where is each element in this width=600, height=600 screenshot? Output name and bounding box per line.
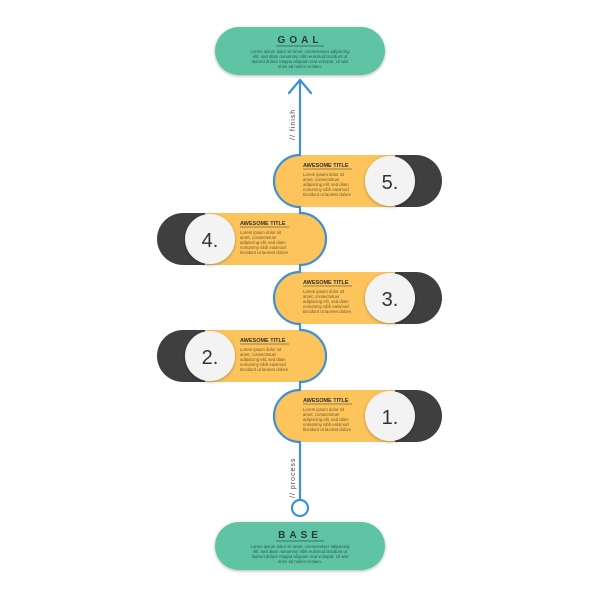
step 3: Lorem ipsum dolor sit: [303, 289, 345, 294]
text: goal body: Lorem ipsum dolor sit amet, consectetuer adipiscing: [250, 49, 350, 54]
step 2: Lorem ipsum dolor sit: [240, 347, 282, 352]
step 3: [274, 272, 442, 324]
text: goal body: elit, sed diam nonummy nibh euismod tincidunt ut: [253, 54, 348, 59]
step 4: AWESOME TITLE: [240, 221, 286, 227]
label: process: // process: [290, 458, 297, 498]
text: base body: Lorem ipsum dolor sit amet, consectetuer adipiscing: [250, 544, 350, 549]
step 1: tincidunt ut laoreet dolore: [303, 427, 352, 432]
step 4: amet, consectetuer: [240, 235, 277, 240]
step 5: 5.: [382, 172, 398, 194]
step 3: 3.: [382, 289, 398, 311]
step 4: [157, 213, 326, 265]
path line with arrow: [274, 80, 326, 516]
step 3: nonummy nibh euismod: [303, 304, 349, 309]
step 2: 2.: [202, 347, 218, 369]
step 2: adipiscing elit, sed diam: [240, 357, 286, 362]
step 4: adipiscing elit, sed diam: [240, 240, 286, 245]
text: goal body: [250, 49, 350, 69]
text: base body: enim ad minim veniam.: [278, 559, 322, 564]
step 2: [157, 330, 326, 382]
step 3: amet, consectetuer: [303, 294, 340, 299]
step 4: nonummy nibh euismod: [240, 245, 286, 250]
heading: base: BASE: [278, 530, 322, 541]
step 1: adipiscing elit, sed diam: [303, 417, 349, 422]
step 5: amet, consectetuer: [303, 177, 340, 182]
step 2: tincidunt ut laoreet dolore: [240, 367, 289, 372]
step 1: amet, consectetuer: [303, 412, 340, 417]
text: goal body: laoreet dolore magna aliquam erat volutpat. Ut wisi: [252, 59, 348, 64]
step 4: 4.: [202, 230, 218, 252]
text: base body: laoreet dolore magna aliquam erat volutpat. Ut wisi: [252, 554, 348, 559]
step 1: Lorem ipsum dolor sit: [303, 407, 345, 412]
step 5: tincidunt ut laoreet dolore: [303, 192, 352, 197]
step 5: Lorem ipsum dolor sit: [303, 172, 345, 177]
step 1: [274, 390, 442, 442]
step 3: adipiscing elit, sed diam: [303, 299, 349, 304]
panel: base: [215, 522, 385, 570]
step 5: [274, 155, 442, 207]
step 5: nonummy nibh euismod: [303, 187, 349, 192]
step 4: tincidunt ut laoreet dolore: [240, 250, 289, 255]
step 2: amet, consectetuer: [240, 352, 277, 357]
step 5: adipiscing elit, sed diam: [303, 182, 349, 187]
step 2: AWESOME TITLE: [240, 338, 286, 344]
step 2: nonummy nibh euismod: [240, 362, 286, 367]
text: base body: elit, sed diam nonummy nibh euismod tincidunt ut: [253, 549, 348, 554]
panel: goal: [215, 27, 385, 75]
step 3: AWESOME TITLE: [303, 280, 349, 286]
text: base body: [250, 544, 350, 564]
text: goal body: enim ad minim veniam.: [278, 64, 322, 69]
step 1: AWESOME TITLE: [303, 398, 349, 404]
step 4: Lorem ipsum dolor sit: [240, 230, 282, 235]
step 1: nonummy nibh euismod: [303, 422, 349, 427]
heading: goal: GOAL: [278, 35, 322, 46]
step 3: tincidunt ut laoreet dolore: [303, 309, 352, 314]
step 5: AWESOME TITLE: [303, 163, 349, 169]
label: finish: // finish: [290, 109, 297, 140]
step 1: 1.: [382, 407, 398, 429]
